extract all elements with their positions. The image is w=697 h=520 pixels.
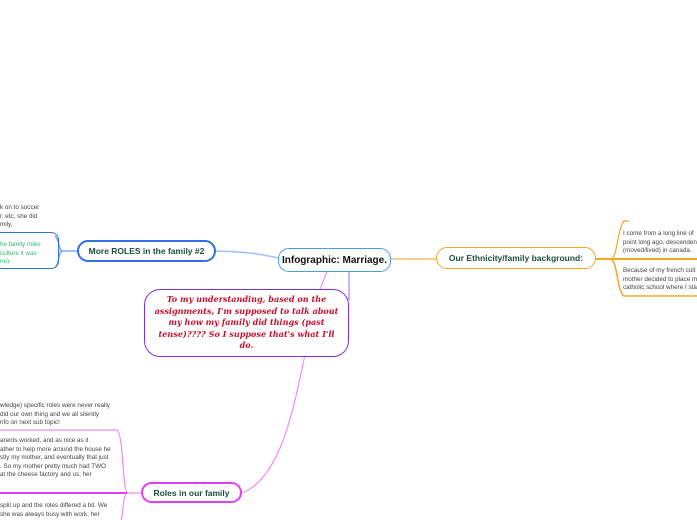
text: ethnicity 2: Because of my french cult <box>623 267 695 274</box>
text: roles 2: . So my mother pretty much had TWO <box>0 463 106 470</box>
green text node <box>0 232 59 269</box>
text: green roles: culture it was <box>0 250 37 257</box>
text: ethnicity 2: catholic school where I sta <box>623 284 697 291</box>
text: ethnicity 1: (moved/lived) in canada. <box>623 247 692 254</box>
callout: To my understanding, based on the assignments, I'm supposed to talk about my how my family did things (past tense)???? So I suppose that's what I'll do. <box>155 294 338 350</box>
text: roles 2: arents worked, and as nice as it <box>0 437 89 444</box>
text: green roles: ne). <box>0 258 11 265</box>
text: roles 1: wledge) specific roles were never really <box>0 402 110 409</box>
text: roles 2: ather to help more around the house he <box>0 446 111 453</box>
text: roles 1 <box>0 402 110 426</box>
text: roles 1: nfo on next sub topic! <box>0 419 60 426</box>
node: roles: Roles in our family <box>153 488 230 498</box>
text: roles 3: split up and the roles differed a bit. We <box>0 502 107 509</box>
text: roles 2: stly my mother, and eventually that just <box>0 454 108 461</box>
text: green roles <box>0 241 41 265</box>
text: ethnicity 2: mother decided to place m <box>623 276 697 283</box>
text: ethnicity 1 <box>623 230 697 254</box>
central node: Infographic: Marriage. <box>282 254 387 266</box>
node: ethnicity: Our Ethnicity/family background: <box>449 253 583 263</box>
text: soccer: r, etc, she did <box>0 213 37 220</box>
text: roles 2: at the cheese factory and us, her <box>0 471 92 478</box>
text: roles 3: she was always busy with work, her <box>0 511 100 518</box>
text: ethnicity 1: I come from a long line of <box>623 230 694 237</box>
text: ethnicity 1: point long ago, descenden <box>623 239 697 246</box>
text: soccer: mily. <box>0 221 12 228</box>
text: ethnicity 2 <box>623 267 697 291</box>
text: roles 2 <box>0 437 111 478</box>
node: More ROLES: More ROLES in the family #2 <box>89 246 204 256</box>
text: roles 1: did our own thing and we all silently <box>0 411 99 418</box>
central node <box>278 248 391 272</box>
node: roles <box>141 482 242 503</box>
text: green roles: he family roles <box>0 241 41 248</box>
text: soccer <box>0 204 40 228</box>
text: soccer: k on to soccer <box>0 204 39 211</box>
text: roles 3 <box>0 502 107 518</box>
node: More ROLES <box>77 240 216 262</box>
node: ethnicity <box>436 247 596 269</box>
